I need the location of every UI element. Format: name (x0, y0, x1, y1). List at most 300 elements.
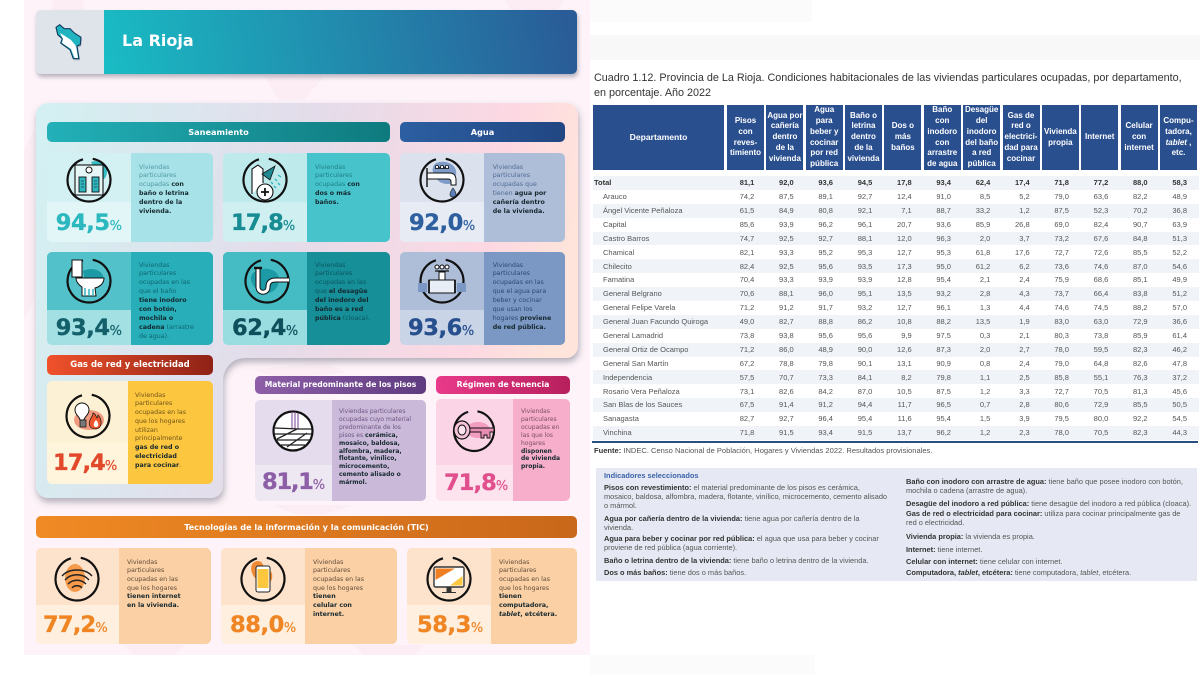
data table: 3,9 (1019, 414, 1030, 423)
card: 88,0% celular: ocupadas en las (313, 576, 364, 583)
heading: Agua: Agua (471, 127, 494, 137)
data table: 82,3 (1133, 428, 1148, 437)
table header: cocinar (810, 138, 838, 146)
data table: 72,7 (1054, 248, 1069, 257)
table header: dentro (772, 132, 797, 141)
card: 77,2% internet (36, 548, 211, 644)
data table: 75,9 (1054, 275, 1069, 284)
table header: Pisos (735, 116, 756, 125)
data table: 85,8 (1054, 373, 1069, 382)
data table: 2,0 (980, 345, 990, 354)
card: 92,0% agua por cañería: particulares (493, 172, 530, 179)
title: La Rioja (122, 31, 194, 50)
data table: 72,9 (1094, 400, 1108, 409)
icon: wifi (54, 556, 100, 602)
data table: 88,8 (818, 317, 833, 326)
data table: 95,4 (858, 414, 872, 423)
card: 93,4% inodoro (47, 252, 213, 345)
table header: pública (968, 159, 996, 168)
heading: Agua (400, 122, 565, 142)
data table: 7,1 (901, 206, 912, 215)
data table: 84,8 (1133, 234, 1148, 243)
data table: 94,4 (858, 400, 872, 409)
data table: 90,7 (1133, 220, 1148, 229)
icon: province map (55, 24, 82, 60)
data table: 93,9 (779, 220, 794, 229)
data table: 93,9 (818, 275, 833, 284)
data table: 93,8 (779, 331, 794, 340)
data table: General Lamadrid (603, 331, 663, 340)
card: 77,2% internet: que los hogares (127, 585, 177, 592)
table header: inodoro (927, 127, 957, 136)
data table: 83,8 (1133, 289, 1148, 298)
data table: 26,8 (1015, 220, 1030, 229)
data table: 12,7 (897, 248, 912, 257)
data table: 91,5 (858, 428, 872, 437)
card: 93,6% red pública: que usan los (493, 306, 533, 313)
data table: 92,2 (1133, 414, 1148, 423)
card: 92,0% agua por cañería: cañería dentro (493, 199, 545, 206)
table header: dentro (851, 132, 876, 141)
data table: 90,9 (936, 359, 951, 368)
data table: 13,5 (897, 289, 912, 298)
table header: Gas de (1008, 111, 1034, 120)
data table: 87,0 (1133, 262, 1148, 271)
card: 58,3% computadora: tablet, etcétera. (499, 611, 557, 618)
data table: Chamical (603, 248, 634, 257)
card: 88,0% celular: particulares (313, 567, 350, 574)
data table: 5,2 (1019, 192, 1030, 201)
data table: 93,9 (858, 275, 872, 284)
data table: 3,7 (1019, 234, 1030, 243)
data table: 79,0 (1054, 359, 1069, 368)
card: 62,4% desagüe: ocupadas en las (315, 279, 366, 286)
data table: 62,4 (976, 178, 990, 187)
data table: 88,0 (1133, 178, 1148, 187)
data table: 63,6 (1094, 192, 1108, 201)
card: 58,3% computadora: 58,3% (417, 612, 483, 638)
table header: internet (1124, 143, 1154, 152)
card: 58,3% computadora: Viviendas (499, 559, 529, 566)
data table: 1,5 (980, 414, 990, 423)
data table: 74,2 (740, 192, 754, 201)
data table: 82,1 (740, 248, 754, 257)
data table: 86,0 (779, 345, 794, 354)
card: 93,6% red pública: particulares (493, 270, 530, 277)
data table: 12,8 (897, 275, 912, 284)
card: 93,4% inodoro: mochila o (139, 315, 173, 322)
data table: 79,0 (1054, 192, 1069, 201)
card: 81,1% pisos: flotante, vinílico, (339, 455, 397, 462)
card: 17,8% dos o más baños: particulares (315, 172, 352, 179)
data table: 61,8 (976, 248, 990, 257)
card: 93,6% red pública: beber y cocinar (493, 297, 542, 304)
table header: Internet (1085, 132, 1114, 141)
card: 17,8% dos o más baños: ocupadas con (315, 181, 360, 188)
data table: 3,3 (1019, 387, 1030, 396)
data table: 70,4 (740, 275, 754, 284)
data table: 93,3 (779, 275, 794, 284)
icon: bathroom plan (66, 158, 112, 203)
data table: 2,3 (1019, 428, 1030, 437)
data table: 69,0 (1054, 220, 1069, 229)
table title: en porcentaje. Año 2022 (594, 86, 711, 98)
data table: 10,5 (897, 387, 912, 396)
card: 58,3% computadora: que los hogares (499, 585, 549, 592)
card: 92,0% agua por cañería: de la vivienda. (493, 208, 545, 215)
data table: 51,2 (1172, 289, 1187, 298)
data table: 85,5 (1133, 248, 1148, 257)
data table: 70,5 (1094, 387, 1108, 396)
card: 81,1% pisos (255, 400, 426, 501)
table header: a red (972, 148, 991, 157)
data table: 89,1 (818, 192, 833, 201)
data table: 59,5 (1094, 345, 1108, 354)
data table: 2,8 (980, 289, 990, 298)
data table: 91,4 (779, 400, 794, 409)
data table: 90,0 (858, 345, 872, 354)
data table: 2,0 (980, 234, 990, 243)
data table: 72,9 (1133, 317, 1148, 326)
card: 17,4% gas: para cocinar. (135, 462, 181, 469)
table header (593, 105, 1197, 170)
table header: baños (891, 143, 915, 152)
data table: 81,3 (1133, 387, 1148, 396)
left page background (24, 0, 590, 655)
table header: de la (776, 143, 794, 152)
table header: red o (1011, 121, 1031, 130)
data table: 11,6 (898, 414, 912, 423)
data table: 72,7 (1054, 387, 1069, 396)
card: 17,4% gas: gas de red o (135, 444, 179, 451)
data table: 2,1 (1019, 331, 1030, 340)
data table: 47,8 (1172, 359, 1187, 368)
card: 58,3% computadora: tienen (499, 593, 522, 600)
card: 62,4% desagüe: que el desagüe (315, 288, 368, 295)
card: 77,2% internet: tienen internet (127, 593, 181, 600)
data table: 73,3 (818, 373, 833, 382)
indicators left column: Agua por cañería dentro de la vivienda: tiene agua por cañería dentro de la (604, 514, 860, 522)
data table: 85,9 (1133, 331, 1148, 340)
data table: 49,0 (740, 317, 754, 326)
data table: 87,5 (779, 192, 794, 201)
data table: 95,2 (818, 248, 833, 257)
data table: 72,6 (1094, 248, 1108, 257)
data table: 79,8 (936, 373, 951, 382)
data table: 11,7 (898, 400, 912, 409)
data table: 17,8 (897, 178, 912, 187)
data table: 96,1 (936, 303, 951, 312)
data table: 4,3 (1019, 289, 1030, 298)
card: 58,3% computadora: ocupadas en las (499, 576, 550, 583)
card: 71,8% vivienda propia (436, 399, 570, 501)
heading: Saneamiento: Saneamiento (188, 127, 249, 137)
indicators left column: Agua para beber y cocinar por red pública: el agua que usa para beber y cocinar (604, 534, 879, 542)
data table: 80,0 (1094, 414, 1108, 423)
data table: 80,6 (1054, 400, 1069, 409)
data table: 93,2 (858, 303, 872, 312)
data table: 2,8 (1019, 400, 1030, 409)
indicators heading: Indicadores seleccionados (604, 471, 698, 480)
card: 94,5% baño o letrina: baño o letrina (139, 190, 189, 197)
card: 92,0% agua por cañería: ocupadas que (493, 181, 537, 188)
data table: 95,6 (818, 331, 833, 340)
data table: 88,7 (936, 206, 951, 215)
data table: 36,8 (1172, 206, 1187, 215)
table header: reves- (734, 138, 757, 146)
card: 94,5% baño o letrina: vivienda. (139, 208, 171, 215)
card: 88,0% celular: tienen (313, 593, 336, 600)
icon: faucet (419, 158, 465, 203)
card: 81,1% pisos: Viviendas particulares (339, 408, 405, 415)
data table: 70,6 (740, 289, 754, 298)
card: 88,0% celular: Viviendas (313, 559, 343, 566)
indicators right column: Computadora, tablet, etcétera: tiene computadora, tablet, etcétera. (906, 568, 1131, 576)
data table: 84,2 (818, 387, 833, 396)
heading: Material predominante de los pisos (255, 376, 426, 394)
table header: Baño (932, 105, 952, 114)
data table: 73,8 (1094, 331, 1108, 340)
data table: 66,4 (1094, 289, 1108, 298)
data table: 1,1 (980, 373, 990, 382)
indicators left column: vivienda. (604, 523, 633, 532)
table header: del (976, 116, 987, 125)
data table: 54,5 (1172, 414, 1187, 423)
icon: water valve (418, 258, 466, 304)
table header: inodoro (967, 127, 997, 136)
table header: Agua (814, 105, 834, 114)
card: 92,0% agua por cañería: 92,0% (409, 210, 475, 236)
panel: indicadores seleccionados (596, 468, 1197, 581)
table header: con (1132, 132, 1146, 141)
data table: Ángel Vicente Peñaloza (603, 206, 683, 215)
table header: propia (1048, 138, 1073, 146)
table header: de la (854, 143, 873, 152)
data table: 70,2 (1133, 206, 1148, 215)
indicators right column: Gas de red o electricidad para cocinar: utiliza para cocinar principalmente gas de (906, 508, 1180, 518)
data table: 96,4 (818, 414, 833, 423)
data table: 88,1 (858, 234, 872, 243)
data table: 79,5 (1054, 414, 1069, 423)
data table: 54,6 (1172, 262, 1187, 271)
data table: 17,6 (1015, 248, 1030, 257)
data table: 12,0 (897, 234, 912, 243)
card: 88,0% celular: internet. (313, 611, 344, 618)
data table: 78,8 (779, 359, 794, 368)
card: 81,1% pisos: 81,1% (262, 469, 325, 495)
data table: 85,6 (740, 220, 754, 229)
data table: 87,5 (1054, 206, 1069, 215)
table header: electrici- (1005, 132, 1037, 141)
data table: 1,9 (1019, 317, 1030, 326)
data table: 50,5 (1172, 400, 1187, 409)
data table: 92,7 (858, 192, 872, 201)
data table: 84,9 (779, 206, 794, 215)
data table: 80,8 (818, 206, 833, 215)
data table: 1,2 (1019, 206, 1030, 215)
panel background: saneamiento, agua, gas (33, 103, 583, 506)
card: 62,4% desagüe: pública (cloaca). (315, 315, 370, 322)
data table: 96,1 (858, 220, 872, 229)
data table: 73,2 (1054, 234, 1069, 243)
data table: 83,0 (1054, 317, 1069, 326)
data table: 36,6 (1172, 317, 1187, 326)
data table: Vinchina (603, 428, 632, 437)
data table: 52,2 (1172, 248, 1187, 257)
data table: 12,7 (897, 303, 912, 312)
heading: Material predominante de los pisos: Material predominante de los pisos (265, 380, 416, 389)
data table: 95,4 (936, 275, 951, 284)
heading: TIC: Tecnologías de la información y la comunicación (TIC) (184, 522, 429, 532)
data table: 1,3 (980, 303, 990, 312)
table header: Desagüe (965, 105, 998, 114)
card: 93,6% red pública: que el agua para (493, 288, 546, 295)
data table: 82,7 (740, 414, 754, 423)
card: 77,2% internet: en la vivienda. (127, 602, 179, 609)
data table: 45,6 (1172, 387, 1187, 396)
data table: 61,2 (976, 262, 990, 271)
card: 93,6% red pública: hogares proviene (493, 315, 551, 322)
data table: 74,6 (1054, 303, 1069, 312)
card: 62,4% desagüe (223, 252, 390, 345)
data table: 61,5 (740, 206, 754, 215)
card: 81,1% pisos: pisos es cerámica, (339, 432, 398, 439)
data table: 68,6 (1094, 275, 1108, 284)
icon: shower (242, 158, 288, 203)
card: 17,4% gas: 17,4% (53, 450, 117, 476)
data table: Sanagasta (603, 414, 639, 423)
data table: 48,9 (818, 345, 833, 354)
card: 71,8% vivienda propia: las que los (521, 432, 553, 439)
indicators right column: mochila o cadena (arrastre de agua). (906, 486, 1027, 495)
table header: con (935, 138, 949, 146)
data table: 8,5 (980, 192, 990, 201)
card: 81,1% pisos: microcemento, (339, 463, 389, 470)
data table: 13,5 (976, 317, 990, 326)
indicators left column (604, 482, 887, 576)
heading: Saneamiento (47, 122, 390, 142)
icon: key (452, 410, 496, 452)
table header: cocinar (1007, 154, 1035, 163)
data table: 82,6 (1133, 359, 1148, 368)
table header: vivienda (847, 154, 880, 163)
card: 71,8% vivienda propia: Viviendas (521, 408, 550, 415)
data table: Total (594, 178, 611, 187)
table header: Compu- (1163, 116, 1194, 125)
data table: 2,7 (1019, 345, 1030, 354)
card: 17,8% dos o más baños (223, 153, 390, 242)
data table: 17,3 (897, 262, 912, 271)
card: 81,1% pisos: mosaico, baldosa, (339, 440, 400, 447)
card: 93,4% inodoro: ocupadas en las (139, 279, 190, 286)
card: 17,4% gas: electricidad (135, 453, 177, 460)
data table: 74,7 (740, 234, 754, 243)
card: 88,0% celular (221, 548, 397, 644)
card: 93,4% inodoro: 93,4% (56, 315, 122, 341)
card: 77,2% internet: ocupadas en las (127, 576, 178, 583)
data table: 52,3 (1094, 206, 1108, 215)
table header: pública (810, 159, 838, 168)
card: 58,3% computadora (407, 548, 577, 644)
indicators right column (906, 476, 1191, 576)
heading: TIC (36, 516, 577, 538)
data table: 94,5 (858, 178, 872, 187)
card: 17,4% gas: particulares (135, 400, 172, 407)
table header: Dos o (892, 121, 914, 130)
data table: 92,0 (779, 178, 794, 187)
data table: General Felipe Varela (603, 303, 675, 312)
data table: 88,1 (779, 289, 794, 298)
card: 77,2% internet: particulares (127, 567, 164, 574)
data table: 97,5 (936, 331, 951, 340)
card: 81,1% pisos: alfombra, madera, (339, 448, 402, 455)
card: 93,6% red pública: Viviendas (493, 262, 523, 269)
card: 88,0% celular: celular con (313, 602, 352, 609)
indicators left column: mosaico, baldosa, alfombra, madera, flotante, vinílico, microcemento, cemento alisado (604, 492, 887, 501)
card: 92,0% agua por cañería (400, 153, 565, 242)
table header: Vivienda (1044, 127, 1077, 136)
icon: computer (426, 556, 472, 602)
indicators left column: Dos o más baños: tiene dos o más baños. (604, 568, 746, 576)
data table: Capital (603, 220, 626, 229)
card: 17,4% gas: Viviendas (135, 392, 165, 399)
data table: 96,2 (818, 220, 833, 229)
indicators right column: Desagüe del inodoro a red pública: tiene desagüe del inodoro a red pública (cloaca). (906, 498, 1191, 508)
data table: 78,0 (1054, 428, 1069, 437)
table header: tablet , (1166, 138, 1191, 146)
card: 17,8% dos o más baños: 17,8% (231, 210, 295, 236)
data table: 85,1 (1133, 275, 1148, 284)
data table: 79,8 (818, 359, 833, 368)
card: 71,8% vivienda propia: 71,8% (444, 470, 508, 496)
table header: beber y (810, 127, 838, 136)
card: 93,6% red pública: ocupadas en las (493, 279, 544, 286)
data table: 0,3 (980, 331, 990, 340)
indicators right column: Celular con internet: tiene celular con internet. (906, 556, 1063, 566)
data table: 48,9 (1172, 192, 1187, 201)
data table: General San Martín (603, 359, 668, 368)
indicators right column: Internet: tiene internet. (906, 544, 982, 554)
card: 93,6% red pública: 93,6% (408, 315, 474, 341)
indicators right column: Vivienda propia: la vivienda es propia. (906, 532, 1035, 540)
data table: 82,4 (740, 262, 754, 271)
data table: Arauco (603, 192, 627, 201)
card: 58,3% computadora: computadora, (499, 602, 548, 609)
data table: 63,9 (1172, 220, 1187, 229)
card: 17,4% gas: que los hogares (135, 418, 185, 425)
card: 17,8% dos o más baños: Viviendas (315, 164, 345, 171)
data table: 95,3 (936, 248, 951, 257)
data table: 8,2 (901, 373, 912, 382)
data table: 71,2 (740, 303, 754, 312)
data table: 87,5 (936, 387, 951, 396)
table header: timiento (730, 148, 761, 157)
card: 93,4% inodoro: que el baño (139, 288, 176, 295)
table header: tadora, (1165, 127, 1192, 136)
table header: vivienda (769, 154, 801, 163)
card: 88,0% celular: que los hogares (313, 585, 363, 592)
data table: 12,6 (897, 345, 912, 354)
table header: cañería (771, 121, 799, 130)
icon: phone (240, 556, 286, 602)
indicators left column: Baño o letrina dentro de la vivienda: tiene baño o letrina dentro de la vivienda. (604, 556, 869, 564)
data table: 2,5 (1019, 373, 1030, 382)
table header: más (895, 132, 911, 141)
heading: Gas de red y electricidad: Gas de red y electricidad (70, 360, 190, 370)
data table: 49,9 (1172, 275, 1187, 284)
data table: 10,8 (897, 317, 912, 326)
card: 93,6% red pública (400, 252, 565, 345)
